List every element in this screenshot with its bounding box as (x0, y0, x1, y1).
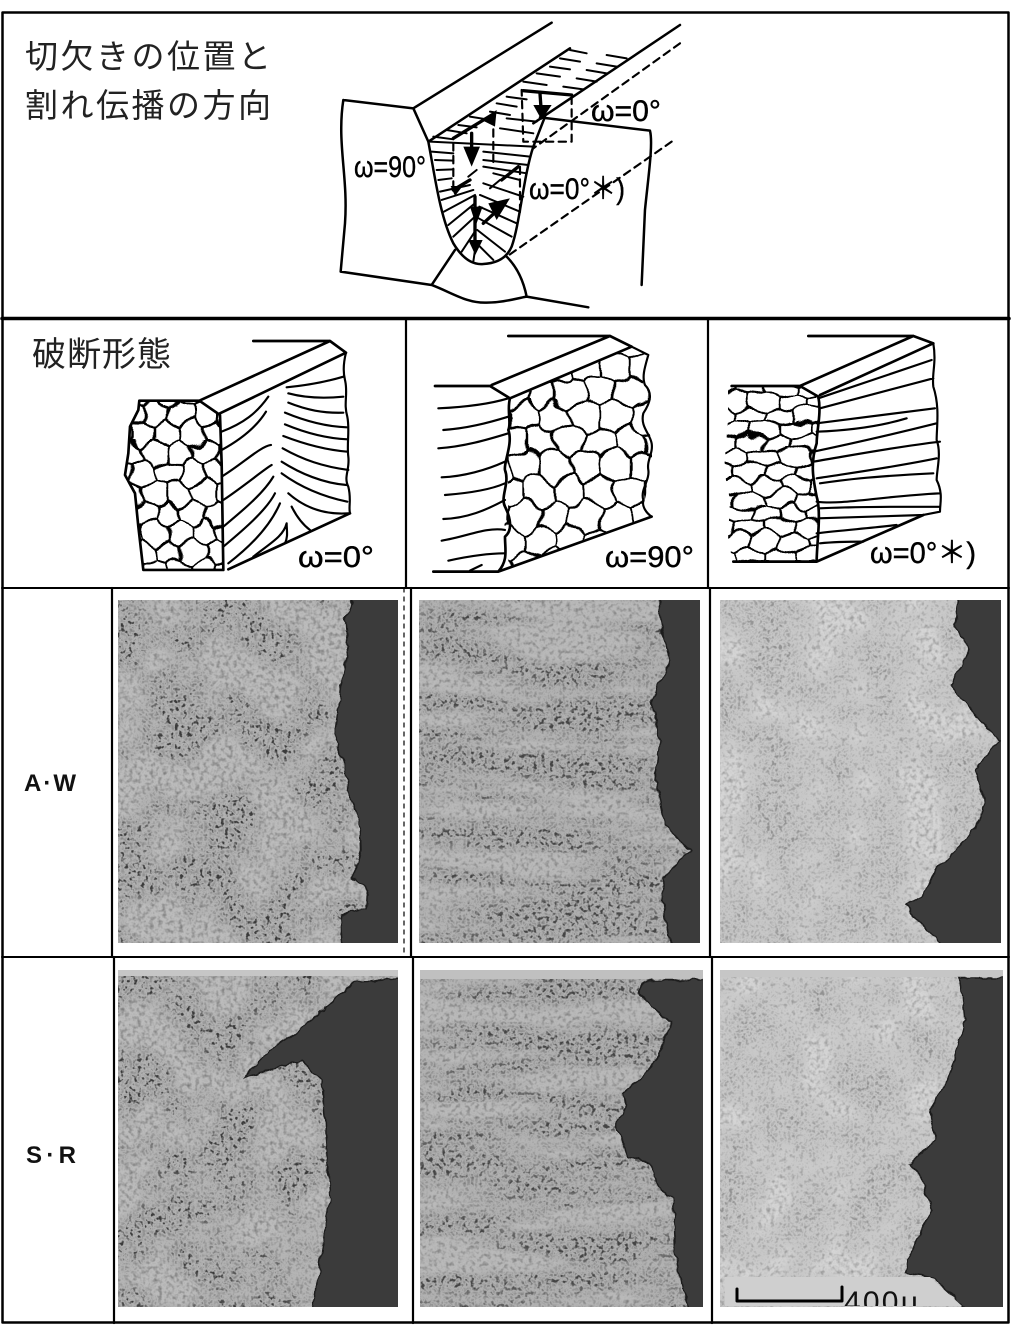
row label: S-R: S·R (26, 1142, 76, 1169)
label: omega 0 star schematic: ω=0°＊) (870, 537, 976, 570)
label: omega 0: ω=0° (591, 95, 661, 128)
weld groove diagram (341, 23, 680, 307)
label: omega 0 star: ω=0°＊) (529, 173, 625, 206)
title: notch position and crack propagation direction: 割れ伝播の方向 (25, 87, 271, 124)
label: omega 0 schematic: ω=0° (298, 541, 374, 574)
micrograph: S-R omega 0 star (720, 970, 1013, 1320)
heading: fracture form: 破断形態 (32, 336, 171, 374)
fracture schematic: omega 0 (124, 340, 352, 572)
micrograph: A-W omega 90 (419, 600, 700, 943)
scale bar: 400 micron (725, 1277, 962, 1319)
micrograph: S-R omega 0 (118, 970, 412, 1320)
scale bar: 400 micron: 400μ (844, 1286, 918, 1319)
title: notch position and crack propagation direction (25, 38, 271, 124)
title: notch position and crack propagation direction: 切欠きの位置と (25, 38, 271, 75)
micrograph: A-W omega 0 (118, 600, 398, 943)
label: omega 90: ω=90° (354, 151, 426, 184)
row label: A-W: A·W (24, 770, 76, 797)
fracture schematic: omega 0 star (715, 336, 941, 570)
fracture schematic: omega 90 (432, 334, 653, 573)
micrograph: A-W omega 0 star (720, 590, 1013, 955)
label: omega 90 schematic: ω=90° (605, 541, 694, 574)
micrograph: S-R omega 90 (420, 970, 717, 1320)
